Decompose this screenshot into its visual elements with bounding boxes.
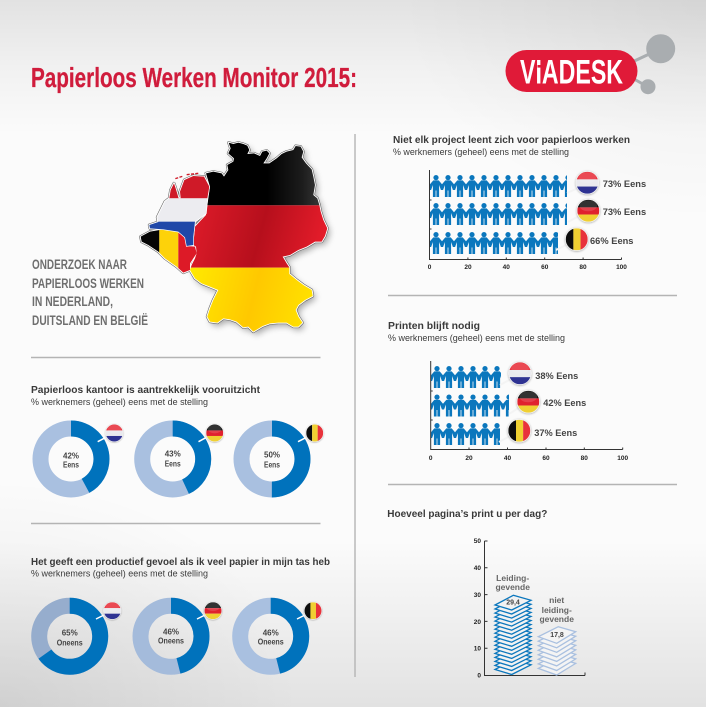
pictogram chart: printen blijft nodig: 42% Eens [543, 398, 586, 409]
stacked paper chart: pages per day: 20 [474, 619, 481, 626]
heading: printen blijft nodig: Printen blijft nodig [388, 320, 480, 332]
heading: niet elk project: Niet elk project leent zich voor papierloos werken [393, 134, 630, 146]
title: Papierloos Werken Monitor 2015: [31, 62, 357, 93]
pictogram chart: printen blijft nodig: 80 [581, 455, 588, 462]
donut: 46% Oneens BE: 46% [263, 628, 279, 638]
donut: 50% Eens BE: 50% [264, 450, 280, 460]
stacked paper chart: pages per day [474, 538, 585, 680]
stack: leidinggevende 29,4 [495, 595, 531, 674]
pictogram chart: niet elk project [428, 170, 646, 271]
donut: 43% Eens DE: Eens [165, 460, 181, 468]
donut: 46% Oneens BE [240, 602, 322, 667]
heading: printen blijft nodig [388, 320, 565, 343]
stacked paper chart: pages per day: 10 [474, 646, 481, 652]
pictogram chart: printen blijft nodig: 40 [504, 455, 511, 462]
pictogram chart: niet elk project: 80 [579, 264, 587, 271]
donut: 50% Eens BE: Eens [264, 460, 280, 470]
stack: leidinggevende 29,4: 29,4 [506, 600, 520, 606]
pictogram chart: niet elk project: 40 [503, 264, 510, 271]
donut: 43% Eens DE [142, 424, 224, 490]
intro text: ONDERZOEK NAAR [32, 257, 127, 272]
pictogram chart: niet elk project: 73% Eens [603, 207, 646, 218]
pictogram chart: printen blijft nodig: 37% Eens [534, 428, 577, 439]
intro text [32, 257, 148, 328]
pictogram chart: niet elk project: 60 [541, 264, 549, 271]
donut: 46% Oneens DE [140, 602, 222, 667]
donut: 65% Oneens NL [39, 602, 121, 667]
pictogram chart: printen blijft nodig: 20 [465, 455, 473, 462]
heading: aantrekkelijk vooruitzicht: % werknemers (geheel) eens met de stelling [31, 397, 208, 407]
intro text: IN NEDERLAND, [32, 294, 113, 309]
stacked paper chart: pages per day: 0 [477, 672, 481, 680]
stacked paper chart: pages per day: gevende [539, 614, 574, 624]
donut: 42% Eens NL [40, 424, 123, 490]
logo: Viadesk: VIADESK [520, 54, 623, 92]
heading: productief gevoel: Het geeft een productief gevoel als ik veel papier in mijn tas heb [31, 556, 330, 568]
stacked paper chart: pages per day: leiding- [542, 605, 572, 615]
heading: hoeveel pagina's: Hoeveel pagina’s print u per dag? [387, 508, 547, 520]
heading: productief gevoel: % werknemers (geheel) eens met de stelling [31, 568, 208, 578]
heading: niet elk project [393, 134, 630, 157]
pictogram chart: niet elk project: 100 [616, 264, 627, 271]
donut: 50% Eens BE [242, 424, 324, 490]
heading: niet elk project: % werknemers (geheel) eens met de stelling [393, 147, 569, 157]
stacked paper chart: pages per day: niet [549, 595, 564, 605]
pictogram chart: printen blijft nodig: 60 [542, 455, 550, 462]
stacked paper chart: pages per day: 30 [474, 592, 481, 599]
stacked paper chart: pages per day: Leiding- [496, 573, 529, 583]
pictogram chart: niet elk project: 73% Eens [603, 179, 646, 190]
donut: 46% Oneens BE: Oneens [258, 638, 284, 646]
logo: Viadesk [506, 34, 675, 94]
donut: 46% Oneens DE: Oneens [158, 636, 184, 646]
donut: 42% Eens NL: Eens [63, 460, 79, 470]
pictogram chart: niet elk project: 0 [428, 264, 432, 271]
donut: 46% Oneens DE: 46% [163, 628, 179, 636]
heading: productief gevoel [31, 556, 330, 578]
stacked paper chart: pages per day: 40 [474, 565, 481, 572]
pictogram chart: printen blijft nodig [429, 361, 629, 462]
pictogram chart: niet elk project: 66% Eens [590, 236, 634, 247]
heading: aantrekkelijk vooruitzicht: Papierloos kantoor is aantrekkelijk vooruitzicht [31, 384, 260, 396]
donut: 65% Oneens NL: Oneens [57, 638, 83, 648]
heading: aantrekkelijk vooruitzicht [31, 384, 260, 407]
donut: 42% Eens NL: 42% [63, 452, 79, 460]
pictogram chart: printen blijft nodig: 100 [617, 455, 629, 462]
pictogram chart: printen blijft nodig: 38% Eens [535, 371, 578, 382]
intro text: PAPIERLOOS WERKEN [32, 276, 144, 291]
donut: 43% Eens DE: 43% [165, 450, 181, 458]
intro text: DUITSLAND EN BELGIË [32, 313, 148, 328]
heading: printen blijft nodig: % werknemers (geheel) eens met de stelling [388, 333, 565, 343]
map: Germany, Netherlands and Belgium flags [137, 140, 330, 335]
stacked paper chart: pages per day: gevende [495, 582, 530, 592]
pictogram chart: printen blijft nodig: 0 [429, 455, 433, 462]
pictogram chart: niet elk project: 20 [464, 264, 472, 271]
stacked paper chart: pages per day: 50 [474, 538, 481, 545]
stack: niet leidinggevende 17,8: 17,8 [550, 632, 564, 639]
stack: niet leidinggevende 17,8 [538, 627, 576, 675]
donut: 65% Oneens NL: 65% [62, 628, 78, 638]
